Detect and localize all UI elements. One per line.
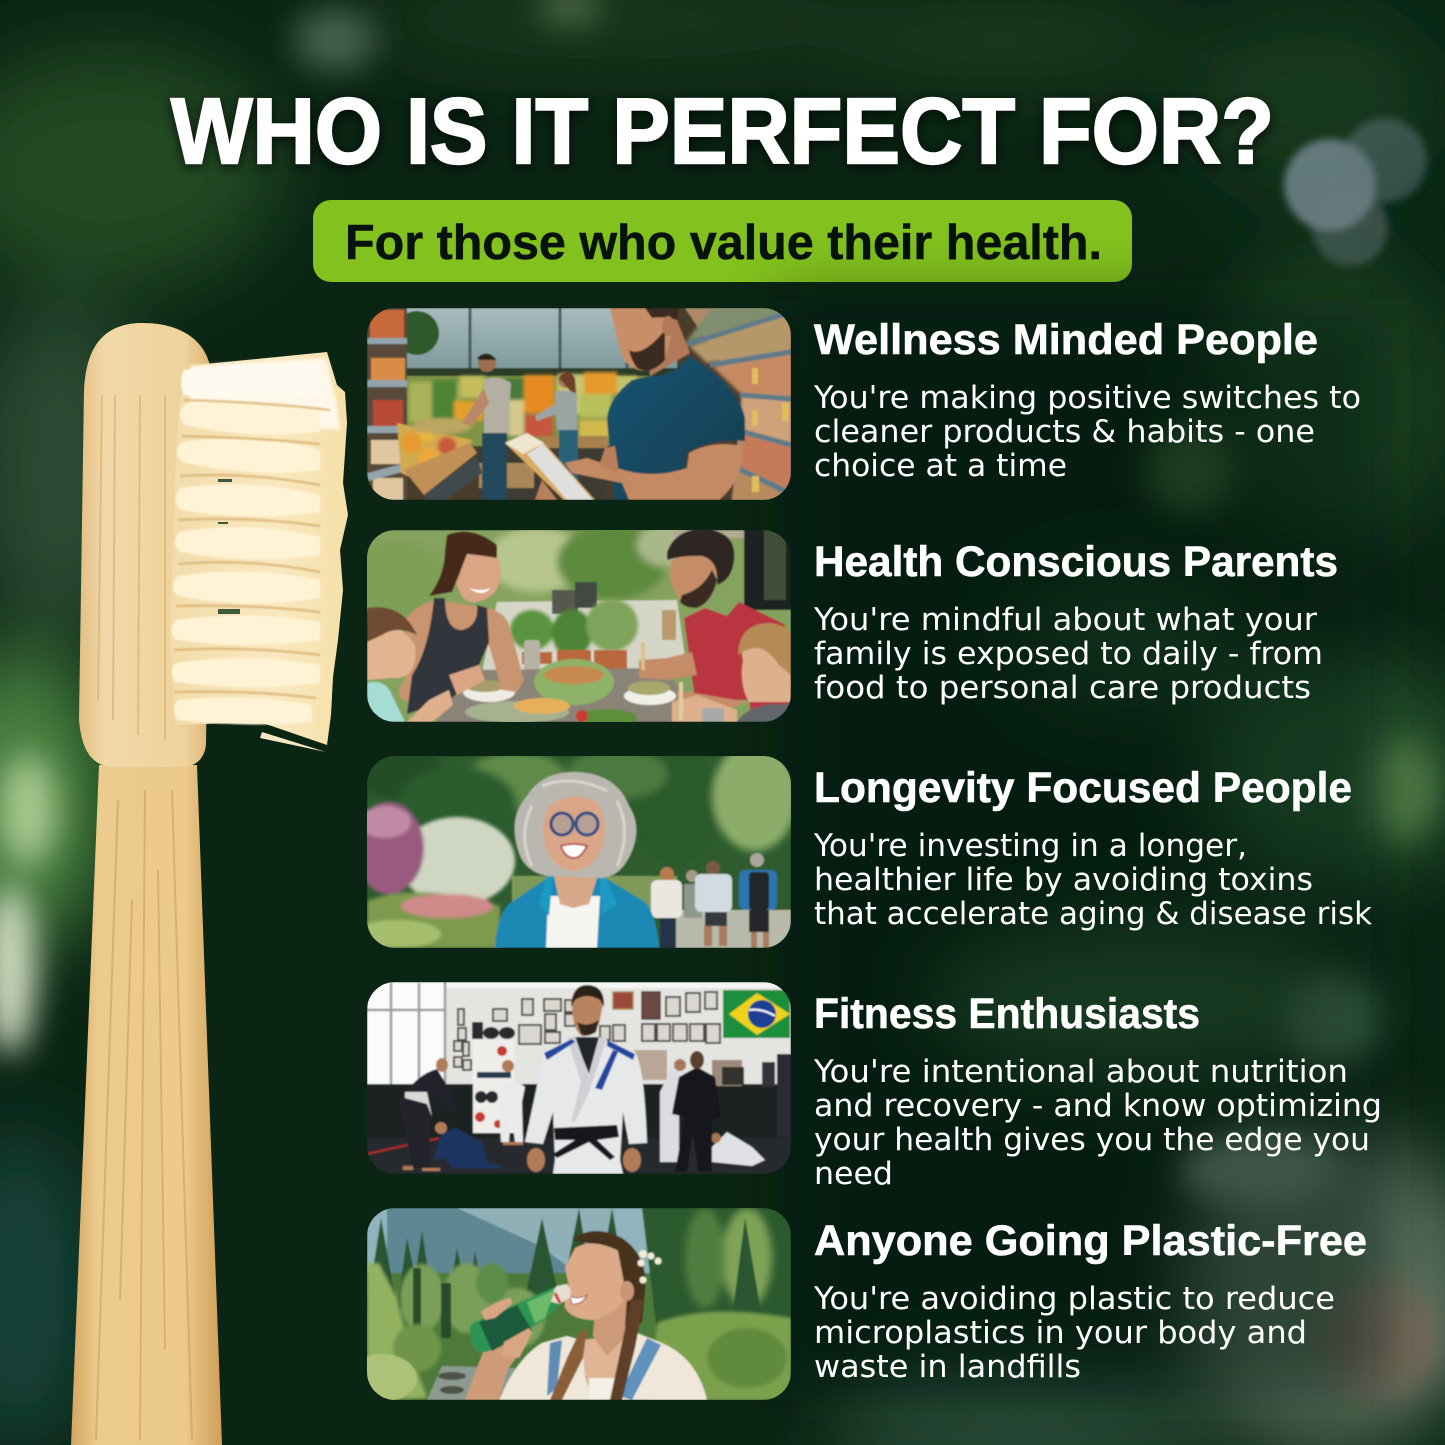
description [813, 1054, 1382, 1192]
right person in black [672, 1067, 721, 1172]
girl [367, 682, 405, 722]
bottle [470, 1284, 571, 1352]
forearm [465, 1326, 532, 1400]
woman shirt [499, 1333, 707, 1400]
description: You're making positive switches to [813, 380, 1361, 416]
subtitle pill: For those who value their health. [345, 216, 1102, 270]
heading: Anyone Going Plastic-Free [814, 1217, 1367, 1265]
flag [723, 990, 790, 1038]
shopper one [478, 354, 496, 372]
photo: man reading label in grocery store [367, 308, 791, 500]
fingers [481, 1298, 512, 1320]
left person [400, 1069, 457, 1168]
bamboo head [79, 323, 211, 767]
photo: family eating salad outdoors [367, 530, 791, 722]
boy [740, 647, 791, 704]
photo: smiling older woman in a park [367, 756, 791, 948]
hair [515, 772, 636, 878]
panel: health conscious parents [347, 523, 1338, 727]
heading: Longevity Focused People [814, 764, 1352, 812]
background students [660, 1067, 679, 1162]
photo: woman drinking from glass bottle in forest [347, 1208, 791, 1402]
right conifers [642, 1208, 791, 1333]
glasses [551, 813, 598, 835]
fruit crate [397, 423, 472, 480]
equipment rack [473, 1040, 514, 1133]
description [813, 1281, 1335, 1385]
hair back [572, 1231, 646, 1326]
heading: Fitness Enthusiasts [814, 990, 1200, 1038]
description [813, 828, 1372, 932]
flowers in hair [638, 1250, 662, 1284]
bristle tufts [172, 364, 320, 725]
braids [610, 1300, 644, 1400]
photo: martial arts gym [367, 982, 791, 1174]
frames on wall [454, 992, 720, 1070]
panel: wellness minded people [367, 308, 1361, 500]
description [813, 602, 1323, 706]
panel: fitness enthusiasts [367, 982, 1382, 1192]
bamboo handle [71, 765, 222, 1445]
man head [669, 554, 718, 600]
right shelves [685, 308, 791, 500]
walkers [651, 853, 777, 948]
left bush and river [427, 1366, 517, 1400]
description: cleaner products & habits - one [814, 414, 1315, 450]
distant forest [367, 1208, 619, 1318]
panel: longevity focused people [352, 741, 1372, 948]
man shirt [684, 602, 791, 722]
panel: anyone going plastic-free [347, 1208, 1367, 1402]
man neck and arm [648, 318, 691, 377]
face [564, 1243, 630, 1320]
description: that accelerate aging & disease risk [814, 896, 1372, 932]
food box [504, 442, 596, 500]
description: microplastics in your body and [814, 1315, 1307, 1351]
description: waste in landfills [814, 1349, 1081, 1385]
heading: Wellness Minded People [814, 316, 1318, 364]
description: You're intentional about nutrition [813, 1054, 1348, 1090]
description: healthier life by avoiding toxins [814, 862, 1313, 898]
subtitle pill [313, 200, 1132, 282]
woman jacket [495, 874, 659, 948]
description: need [814, 1156, 893, 1192]
table [437, 668, 697, 722]
crouching person [433, 1128, 502, 1168]
herbs [510, 599, 638, 657]
white gi student [498, 1081, 525, 1142]
man head [610, 308, 673, 371]
description: choice at a time [814, 448, 1067, 484]
description: and recovery - and know optimizing [814, 1088, 1382, 1124]
description: food to personal care products [814, 670, 1311, 706]
shopper two [558, 371, 568, 388]
description: You're investing in a longer, [813, 828, 1247, 864]
man in white gi [525, 1037, 647, 1174]
man arm [565, 444, 742, 500]
description: your health gives you the edge you [814, 1122, 1370, 1158]
neck [593, 1293, 629, 1356]
description: family is exposed to daily - from [814, 636, 1323, 672]
gaps between tufts [218, 479, 240, 614]
soft dark glow behind text column [780, 300, 1390, 1400]
description [813, 380, 1361, 484]
woman [399, 600, 524, 702]
produce bins [407, 376, 657, 446]
title: WHO IS IT PERFECT FOR? [171, 79, 1274, 183]
toothbrush [71, 323, 348, 1445]
flowers [353, 802, 515, 948]
left shelves [367, 308, 407, 500]
description: You're mindful about what your [813, 602, 1317, 638]
heading: Health Conscious Parents [814, 538, 1338, 586]
description: You're avoiding plastic to reduce [813, 1281, 1335, 1317]
man tee [607, 356, 745, 500]
bristle mass [170, 352, 348, 745]
denim straps [547, 1340, 562, 1396]
face [543, 789, 605, 871]
